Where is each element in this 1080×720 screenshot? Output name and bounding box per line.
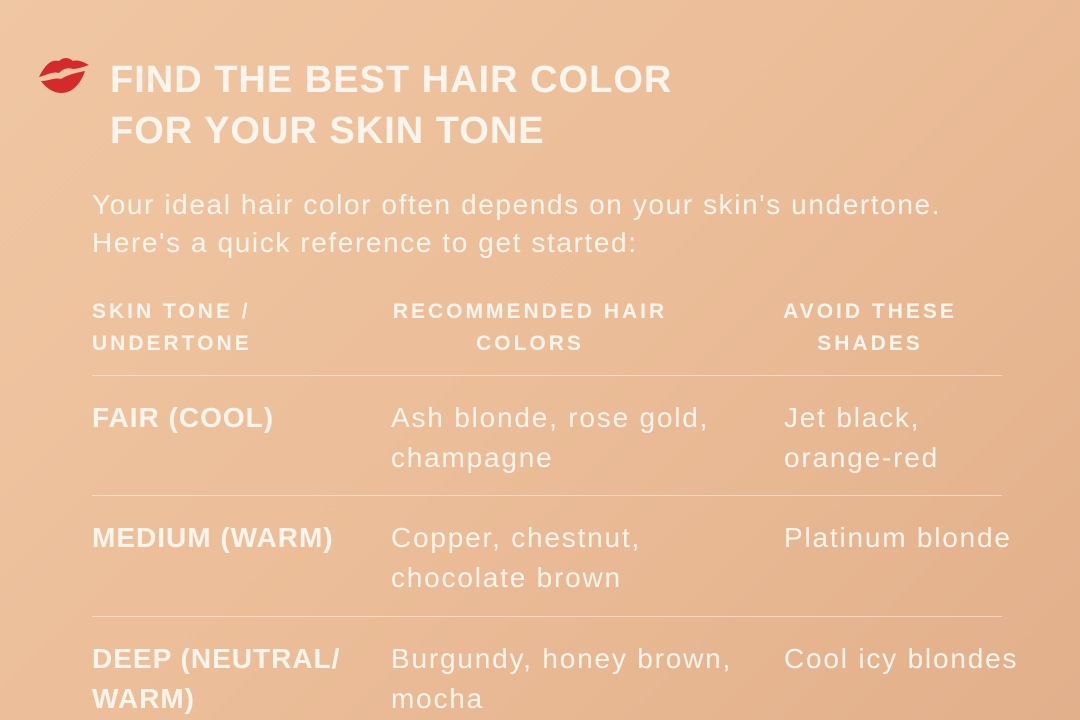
row: medium: chocolate brown [391,562,622,593]
title [110,59,672,152]
icon: lips [39,58,89,93]
row: fair: Ash blonde, rose gold, [391,402,709,433]
subtitle: Your ideal hair color often depends on your skin's undertone. [92,189,941,220]
row: medium: MEDIUM (WARM) [92,522,334,553]
row: fair [92,402,939,473]
table header: AVOID THESE [783,300,957,323]
row: deep [92,643,1018,714]
row: deep: WARM) [92,683,195,714]
table header [92,300,957,355]
subtitle: Here's a quick reference to get started: [92,227,638,258]
table header: SKIN TONE / [92,300,251,323]
row: medium: Platinum blonde [784,522,1012,553]
row: deep: mocha [391,683,484,714]
row: deep: Burgundy, honey brown, [391,643,732,674]
subtitle [92,189,941,258]
row: fair: champagne [391,442,554,473]
row: medium: Copper, chestnut, [391,522,641,553]
row: deep: Cool icy blondes [784,643,1018,674]
row: medium [92,522,1012,593]
table header: COLORS [476,332,584,355]
row: fair: orange-red [784,442,939,473]
table header: SHADES [817,332,923,355]
row: fair: Jet black, [784,402,920,433]
table header: RECOMMENDED HAIR [393,300,667,323]
table header: UNDERTONE [92,332,252,355]
title: FIND THE BEST HAIR COLOR [110,59,672,101]
row: deep: DEEP (NEUTRAL/ [92,643,340,674]
row: fair: FAIR (COOL) [92,402,274,433]
title: FOR YOUR SKIN TONE [110,110,545,152]
